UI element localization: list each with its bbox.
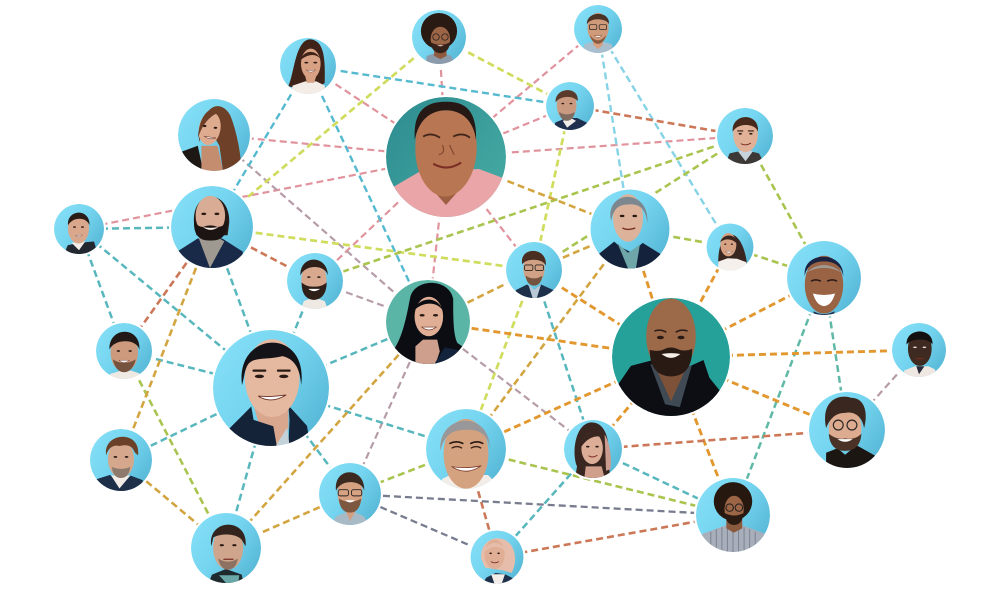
portrait: woman with long dark hair, top left	[280, 38, 336, 94]
connections: rust	[124, 106, 847, 557]
connections: olive green	[124, 136, 824, 548]
portrait: smiling man with grey hair	[426, 409, 506, 489]
connections: slate	[350, 494, 733, 557]
portrait: woman with long black hair on teal	[386, 280, 470, 364]
portrait: large bald man on green teal	[612, 298, 730, 416]
portrait: man with dark hair and stubble, left	[96, 323, 152, 379]
portrait: man with curly hair and glasses, top	[412, 10, 466, 64]
portrait: man with grey hair and navy fleece	[590, 190, 670, 268]
portrait: man with afro in striped shirt	[696, 478, 770, 552]
portrait: man with short dark hair, bottom left	[191, 513, 261, 583]
portrait: man in dark suit, far left	[54, 204, 104, 254]
connections: sea green	[733, 278, 847, 515]
portrait: bearded man with long dark hair	[171, 186, 253, 268]
portrait: man with dark beard, centre left	[287, 253, 343, 309]
portrait: woman with long auburn hair, left	[178, 99, 250, 171]
connections: teal	[79, 227, 733, 557]
portrait: large man in navy jacket	[213, 330, 329, 446]
connections: light blue	[598, 29, 730, 247]
portrait: woman with dark hair and earrings	[564, 420, 622, 478]
portrait: woman with dark hair and white top	[706, 224, 754, 270]
connections: orange	[428, 229, 919, 515]
portrait: man with brown hair and stubble, upper centre	[546, 82, 594, 130]
connection lines	[79, 29, 919, 557]
connections: pink	[79, 29, 745, 322]
connections: blue teal	[212, 66, 570, 322]
portrait: man with glasses, top right	[574, 5, 622, 53]
connections: lime	[212, 37, 570, 449]
portrait: smiling man, right	[787, 241, 861, 315]
portrait: man with dark skin and white collar, far right	[892, 323, 946, 377]
portrait: older woman with blonde hair	[470, 530, 524, 584]
portrait: man with glasses and dark jacket, right	[809, 392, 885, 468]
portrait: large man in pink checked shirt	[386, 97, 506, 217]
portrait: man with glasses and grey shirt, lower centre	[319, 463, 381, 525]
connections: gold	[121, 157, 630, 548]
connections: mauve	[214, 135, 919, 494]
portrait: man in dark suit, upper right	[717, 108, 773, 164]
portrait: man with brown hair and navy jumper, lower left	[90, 429, 152, 491]
portrait: man with glasses and quiff, centre	[506, 242, 562, 298]
